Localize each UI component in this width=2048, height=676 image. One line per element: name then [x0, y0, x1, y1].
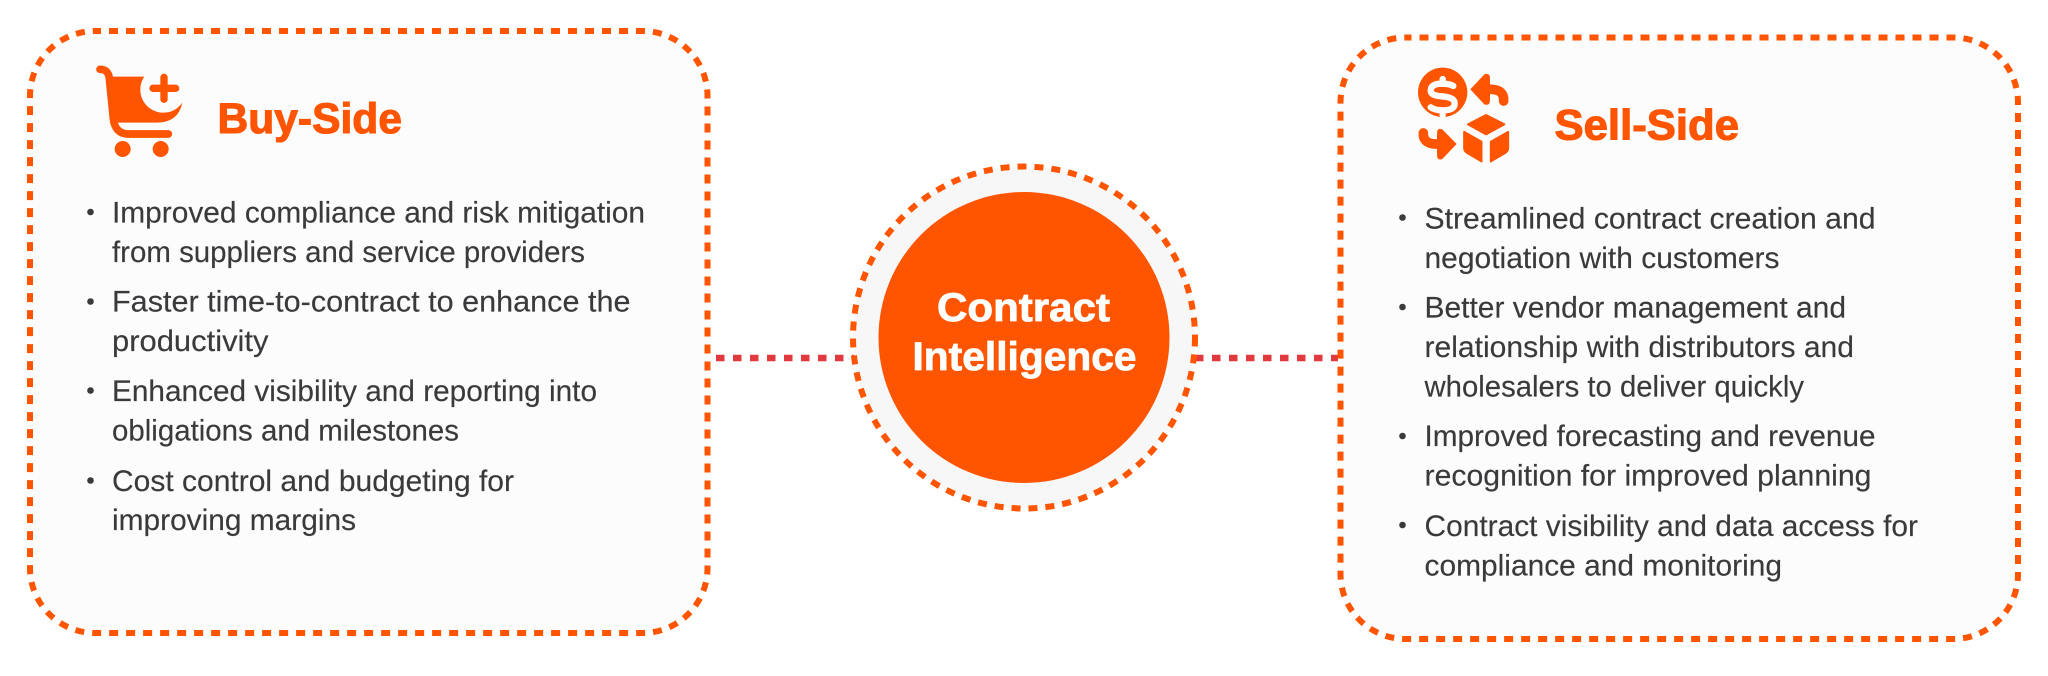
bullet list: buy-side benefits: improving margins [112, 504, 356, 537]
icon: money and package exchange [1418, 68, 1508, 162]
bullet list: sell-side benefits [1399, 202, 1918, 582]
hub label: Intelligence [912, 335, 1136, 379]
bullet list: sell-side benefits: Better vendor management and [1424, 292, 1846, 324]
bullet list: buy-side benefits: obligations and milestones [112, 414, 459, 448]
inner orange circle [878, 192, 1170, 483]
bullet list: sell-side benefits: Improved forecasting and revenue [1424, 420, 1876, 453]
bullet list: buy-side benefits [87, 196, 645, 537]
bullet list: buy-side benefits: Improved compliance and risk mitigation [112, 196, 645, 230]
panel: sell-side [1340, 38, 2018, 639]
bullet list: sell-side benefits: relationship with distributors and [1424, 331, 1854, 364]
heading: Sell-Side: Sell-Side [1554, 102, 1739, 150]
connector: left [716, 355, 856, 361]
central hub: Contract Intelligence [853, 166, 1195, 508]
hub label: Contract [937, 286, 1110, 330]
bullet list: sell-side benefits: compliance and monitoring [1424, 550, 1782, 582]
outer dashed ring [853, 166, 1195, 508]
icon: shopping cart with plus [100, 69, 182, 157]
bullet list: sell-side benefits: recognition for improved planning [1424, 460, 1872, 492]
bullet list: sell-side benefits: negotiation with customers [1424, 242, 1780, 275]
bullet list: sell-side benefits: Streamlined contract creation and [1424, 202, 1876, 236]
bullet list: buy-side benefits: Cost control and budgeting for [112, 465, 514, 498]
panel: buy-side [30, 31, 708, 633]
panel background: sell-side [1340, 38, 2018, 639]
bullet list: buy-side benefits: Faster time-to-contract to enhance the [112, 286, 630, 318]
connector: right [1195, 355, 1338, 361]
panel background: buy-side [30, 31, 708, 633]
bullet list: buy-side benefits: from suppliers and service providers [112, 236, 585, 269]
heading: Buy-Side: Buy-Side [218, 95, 402, 143]
bullet list: buy-side benefits: Enhanced visibility and reporting into [112, 375, 597, 408]
hub label [912, 286, 1136, 379]
bullet list: sell-side benefits: Contract visibility and data access for [1424, 510, 1918, 543]
bullet list: sell-side benefits: wholesalers to deliver quickly [1424, 370, 1804, 404]
bullet list: buy-side benefits: productivity [112, 325, 269, 358]
